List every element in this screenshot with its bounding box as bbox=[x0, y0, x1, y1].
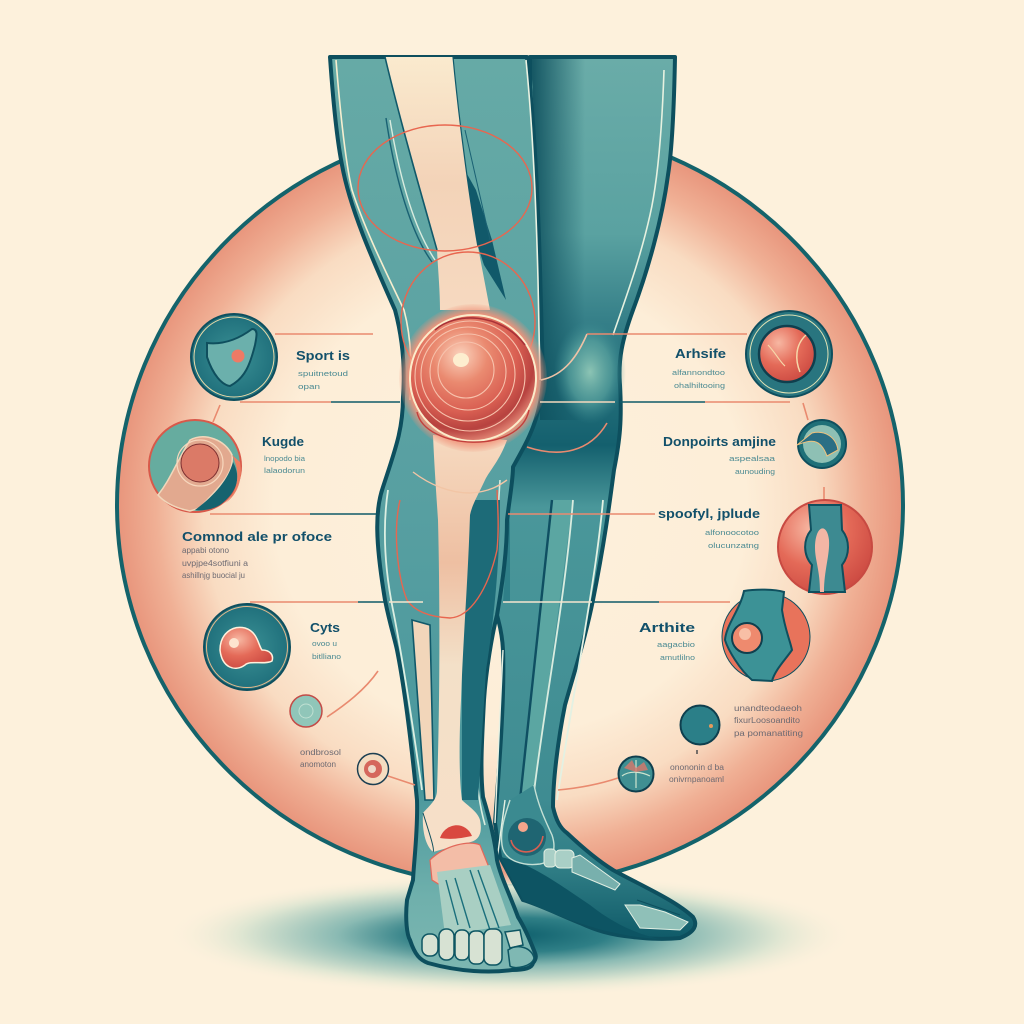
label: spoofyl: spoofyl, jplude bbox=[658, 506, 760, 521]
label: arthrite: Arthite bbox=[639, 620, 695, 635]
icon: arthritis knee bbox=[722, 590, 810, 681]
label: sport: Sport is bbox=[296, 348, 350, 363]
label: donpoirts: aspealsaa bbox=[729, 454, 776, 463]
label: common bbox=[182, 529, 332, 580]
label: lower right note bbox=[734, 704, 803, 738]
label: arthrife: Arhsife bbox=[675, 346, 726, 361]
label: sport: opan bbox=[298, 382, 320, 391]
label: cysts: ovoo u bbox=[312, 639, 337, 648]
label: arthrite: amutlilno bbox=[660, 653, 695, 662]
label: arthrife bbox=[672, 346, 726, 390]
label: lower left note bbox=[300, 748, 341, 769]
label: sport: spuitnetoud bbox=[298, 369, 348, 378]
label: lower left note: anomoton bbox=[300, 760, 336, 769]
label: cysts: Cyts bbox=[310, 620, 340, 635]
floor shadow bbox=[165, 873, 855, 997]
ankle joint of right leg bbox=[502, 785, 554, 864]
label: arthrife: ohalhiltooing bbox=[674, 381, 725, 390]
ankle cap bbox=[440, 825, 472, 839]
tibia bbox=[423, 435, 507, 852]
label: kugde: lalaodorun bbox=[264, 466, 305, 475]
tarsal bones of right foot bbox=[544, 849, 688, 930]
background disc bbox=[117, 124, 903, 886]
icon: teal sphere bbox=[680, 706, 720, 744]
label: arthrite bbox=[639, 620, 695, 662]
femur bbox=[385, 57, 490, 310]
label: sport bbox=[296, 348, 350, 391]
icon: arthritis joint ball bbox=[746, 311, 832, 397]
icon: small mint nodule bbox=[290, 695, 322, 727]
lower leg dark band bbox=[462, 500, 500, 800]
thigh dark band bbox=[462, 165, 506, 300]
connector lines bbox=[210, 334, 824, 790]
label: arthrife: alfannondtoo bbox=[672, 368, 725, 377]
label: cysts: bitlliano bbox=[312, 652, 341, 661]
label: spoofyl bbox=[658, 506, 760, 550]
label: common: ashillnjg buocial ju bbox=[182, 571, 245, 580]
label: cysts bbox=[310, 620, 341, 661]
left leg bbox=[330, 57, 543, 972]
knee joint bbox=[399, 304, 547, 452]
label: spoofyl: alfonoocotoo bbox=[705, 528, 759, 537]
icon: vessel sphere bbox=[618, 756, 654, 792]
label: kugde bbox=[262, 434, 306, 475]
fibula bbox=[412, 620, 434, 800]
left foot bones bbox=[422, 843, 534, 968]
label: bottom right note: onivrnpanoaml bbox=[669, 775, 724, 784]
icon: sport injury bbox=[191, 314, 277, 400]
icon: knuckle joint bbox=[149, 420, 241, 512]
label: common: uvpjpe4sotfiuni a bbox=[182, 559, 249, 568]
right leg bbox=[495, 57, 695, 939]
dark foot shadow bbox=[500, 857, 660, 939]
lower right leg shading bbox=[503, 500, 603, 800]
label: donpoirts: aunouding bbox=[735, 467, 775, 476]
label: lower left note: ondbrosol bbox=[300, 748, 341, 757]
label: donpoirts bbox=[663, 434, 776, 476]
label: kugde: lnopodo bia bbox=[264, 454, 306, 463]
icon: spondylitis knee bbox=[778, 500, 872, 594]
label: lower right note: fixurLoosoandito bbox=[734, 716, 801, 725]
icon: cyst bbox=[204, 604, 290, 690]
label: common: Comnod ale pr ofoce bbox=[182, 529, 332, 544]
label: common: appabi otono bbox=[182, 546, 230, 555]
label: bottom right note: onononin d ba bbox=[670, 763, 725, 772]
label: kugde: Kugde bbox=[262, 434, 304, 449]
label: lower right note: unandteodaeoh bbox=[734, 704, 802, 713]
label: donpoirts: Donpoirts amjine bbox=[663, 434, 776, 449]
icon: small joint cross-section bbox=[797, 420, 846, 468]
label: lower right note: pa pomanatiting bbox=[734, 729, 803, 738]
label: bottom right note bbox=[669, 763, 725, 784]
label: spoofyl: olucunzatng bbox=[708, 541, 759, 550]
label: arthrite: aagacbio bbox=[657, 640, 695, 649]
icon: small red nodule bbox=[358, 754, 388, 784]
toes bbox=[422, 929, 534, 968]
knee callout curves on right leg bbox=[389, 334, 615, 602]
anatomical outline rings bbox=[358, 125, 535, 618]
